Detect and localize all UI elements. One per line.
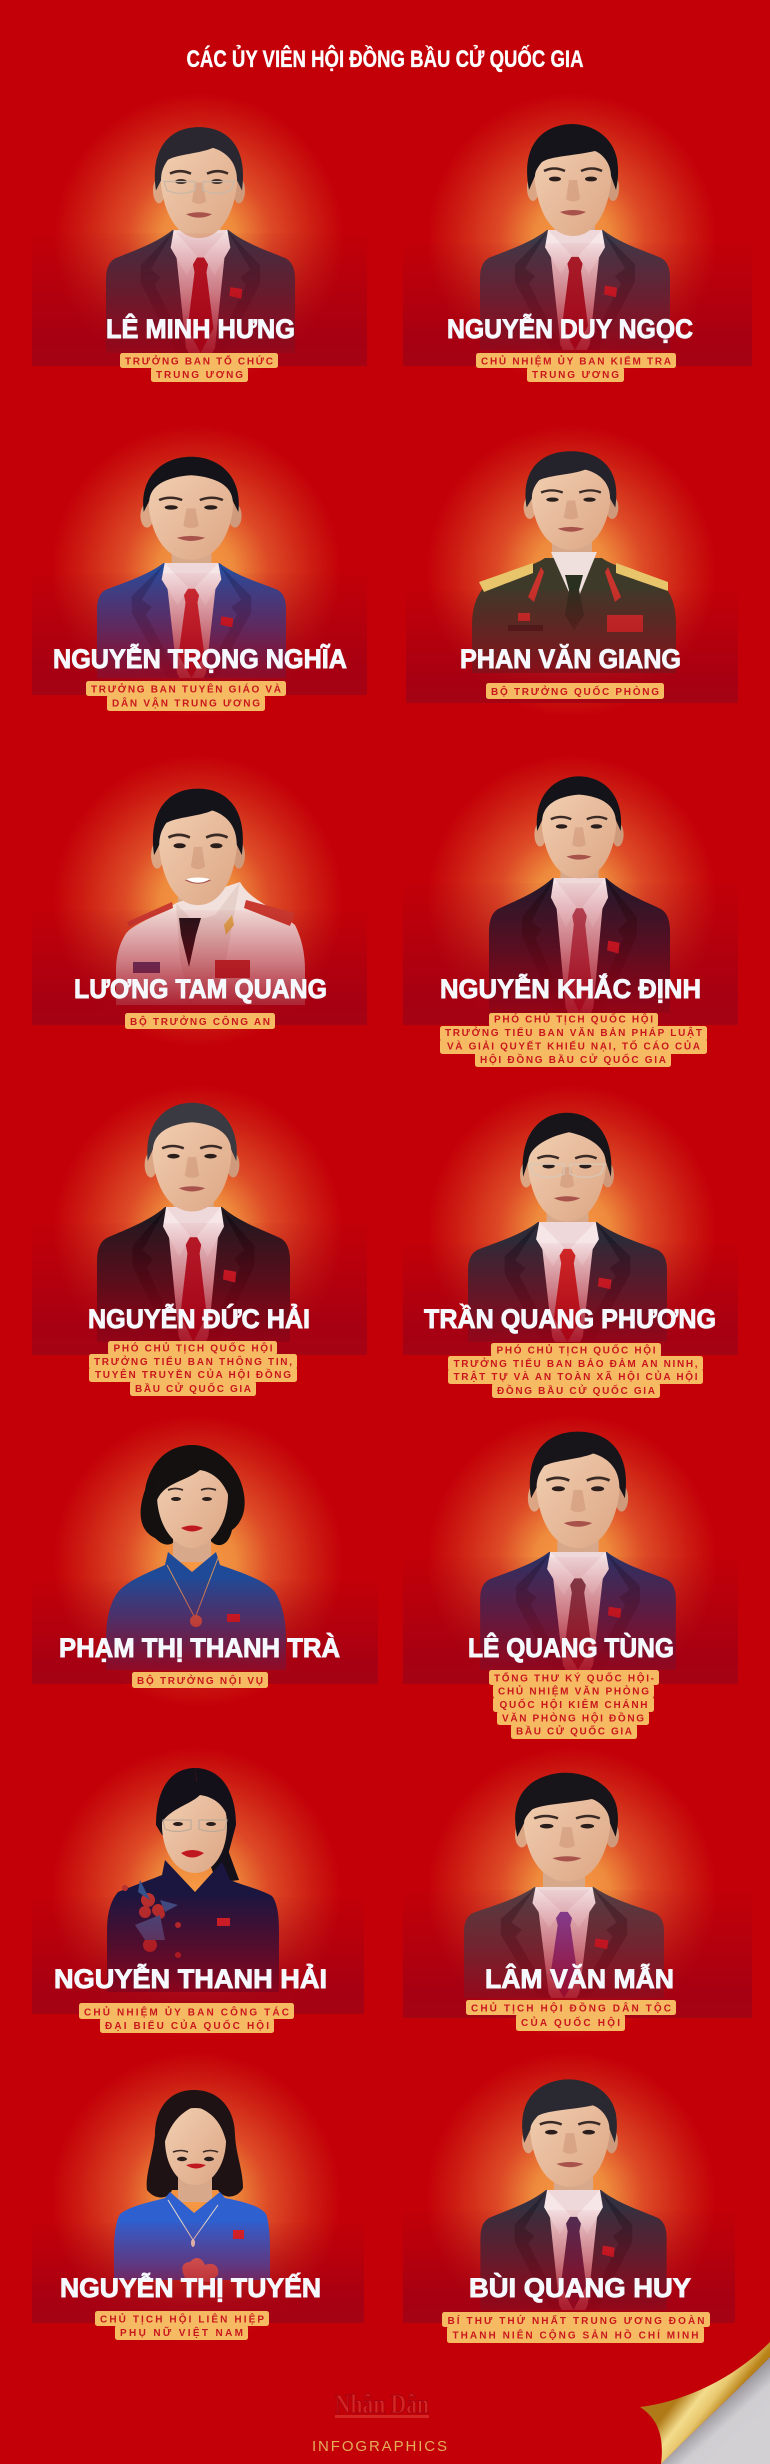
name: PHẠM THỊ THANH TRÀ: [59, 1632, 340, 1663]
role tag: CHỦ NHIỆM VĂN PHÒNG: [498, 1684, 649, 1698]
card: Nguyễn Đức Hải: [32, 1085, 367, 1396]
portrait: Nguyễn Thanh Hải: [107, 1768, 279, 1992]
name: NGUYỄN THỊ TUYẾN: [60, 2272, 321, 2303]
card: Lê Minh Hưng: [32, 93, 367, 385]
role tag: TRUNG ƯƠNG: [156, 370, 243, 381]
portrait: Nguyễn Đức Hải: [97, 1103, 290, 1342]
name panel: [32, 573, 367, 695]
role tag: PHÓ CHỦ TỊCH QUỐC HỘI: [496, 1342, 656, 1356]
name panel: [403, 883, 738, 1025]
role tag: ĐỒNG BẦU CỬ QUỐC GIA: [497, 1383, 655, 1397]
role tag: [125, 1013, 275, 1029]
name: LƯƠNG TAM QUANG: [74, 974, 327, 1004]
role tag: [476, 353, 676, 382]
role tag: PHỤ NỮ VIỆT NAM: [120, 2326, 243, 2339]
name: NGUYỄN KHẮC ĐỊNH: [440, 973, 701, 1004]
card: Phạm Thị Thanh Trà: [32, 1415, 378, 1707]
card: Nguyễn Trọng Nghĩa: [32, 425, 367, 717]
card: Lâm Văn Mẫn: [403, 1747, 752, 2039]
name: NGUYỄN DUY NGỌC: [447, 313, 693, 344]
role tag: [89, 1340, 297, 1396]
card: Phan Văn Giang: [406, 425, 738, 717]
name panel: [32, 233, 367, 366]
role tag: TRUNG ƯƠNG: [532, 370, 619, 381]
name: LÊ QUANG TÙNG: [468, 1632, 674, 1663]
role tag: [95, 2311, 269, 2340]
name panel: [406, 590, 738, 703]
role tag: CHỦ NHIỆM ỦY BAN CÔNG TÁC: [84, 2006, 289, 2018]
name panel: [403, 1890, 752, 2018]
name: TRẦN QUANG PHƯƠNG: [424, 1303, 716, 1334]
role tag: DÂN VẬN TRUNG ƯƠNG: [112, 696, 260, 710]
portrait: Lâm Văn Mẫn: [464, 1773, 664, 1998]
portrait: Lương Tam Quang, white uniform: [116, 789, 305, 1005]
role tag: CHỦ NHIỆM ỦY BAN KIỂM TRA: [481, 354, 671, 368]
card: Nguyễn Khắc Định: [403, 755, 738, 1067]
name panel: [403, 243, 752, 366]
role tag: [489, 1670, 659, 1739]
name panel: [403, 2210, 735, 2323]
role tag: CHỦ TỊCH HỘI ĐỒNG DÂN TỘC: [471, 2002, 671, 2014]
card: Nguyễn Thị Tuyến: [32, 2052, 364, 2344]
role tag: BỘ TRƯỞNG QUỐC PHÒNG: [491, 684, 659, 698]
role tag: [132, 1672, 268, 1688]
name panel: [32, 1223, 367, 1355]
role tag: BỘ TRƯỞNG NỘI VỤ: [137, 1674, 263, 1687]
role tag: TRƯỞNG BAN TỔ CHỨC: [125, 354, 273, 368]
portrait: Phạm Thị Thanh Trà: [106, 1445, 286, 1670]
portrait: Bùi Quang Huy: [480, 2079, 667, 2310]
name: LÂM VĂN MẪN: [485, 1963, 674, 1994]
role tag: ĐẠI BIỂU CỦA QUỐC HỘI: [105, 2018, 269, 2032]
role tag: CỦA QUỐC HỘI: [521, 2015, 620, 2029]
card: Trần Quang Phương: [403, 1085, 738, 1398]
name: LÊ MINH HƯNG: [106, 313, 295, 344]
role tag: BẦU CỬ QUỐC GIA: [135, 1381, 251, 1395]
card: Bùi Quang Huy: [403, 2052, 735, 2344]
portrait: Nguyễn Thị Tuyến: [114, 2090, 270, 2282]
portrait: Lê Minh Hưng: [106, 127, 295, 353]
portrait: Nguyễn Duy Ngọc: [480, 124, 670, 350]
card: Lương Tam Quang: [32, 755, 367, 1047]
role tag: [442, 2312, 710, 2343]
name panel: [403, 1243, 738, 1355]
role tag: PHÓ CHỦ TỊCH QUỐC HỘI: [494, 1012, 653, 1026]
role tag: VÀ GIẢI QUYẾT KHIẾU NẠI, TỐ CÁO CỦA: [447, 1038, 700, 1052]
portrait: Phan Văn Giang, military uniform: [472, 451, 676, 673]
role tag: HỘI ĐỒNG BẦU CỬ QUỐC GIA: [480, 1052, 666, 1066]
card: Nguyễn Duy Ngọc: [403, 93, 752, 385]
role tag: PHÓ CHỦ TỊCH QUỐC HỘI: [114, 1340, 273, 1354]
name: NGUYỄN TRỌNG NGHĨA: [53, 643, 347, 674]
role tag: TRƯỞNG TIỂU BAN VĂN BẢN PHÁP LUẬT: [445, 1026, 702, 1039]
role tag: TRẬT TỰ VÀ AN TOÀN XÃ HỘI CỦA HỘI: [454, 1370, 698, 1383]
name: PHAN VĂN GIANG: [460, 643, 681, 674]
name: NGUYỄN THANH HẢI: [54, 1962, 327, 1994]
portrait: Nguyễn Khắc Định: [489, 776, 670, 1013]
role tag: [79, 2003, 294, 2033]
name panel: [32, 910, 367, 1025]
name panel: [32, 2223, 364, 2323]
role tag: QUỐC HỘI KIÊM CHÁNH: [500, 1697, 648, 1711]
role tag: BỘ TRƯỞNG CÔNG AN: [130, 1015, 270, 1028]
role tag: [120, 353, 278, 382]
role tag: [448, 1342, 703, 1398]
role tag: [486, 683, 664, 699]
role tag: BẦU CỬ QUỐC GIA: [516, 1724, 632, 1738]
role tag: VĂN PHÒNG HỘI ĐỒNG: [502, 1712, 644, 1724]
page curl corner: [640, 2342, 770, 2464]
role tag: THANH NIÊN CỘNG SẢN HỒ CHÍ MINH: [452, 2328, 698, 2342]
portrait: Lê Quang Tùng: [480, 1432, 676, 1670]
role tag: [466, 2000, 676, 2031]
role tag: TỔNG THƯ KÝ QUỐC HỘI-: [494, 1670, 654, 1684]
title: CÁC ỦY VIÊN HỘI ĐỒNG BẦU CỬ QUỐC GIA: [186, 44, 584, 73]
role tag: TRƯỞNG BAN TUYÊN GIÁO VÀ: [91, 682, 281, 696]
role tag: TRƯỞNG TIỂU BAN BẢO ĐẢM AN NINH,: [454, 1357, 698, 1370]
card: Nguyễn Thanh Hải: [32, 1747, 364, 2039]
role tag: TRƯỞNG TIỂU BAN THÔNG TIN,: [94, 1355, 292, 1368]
name panel: [403, 1557, 738, 1684]
portrait: Nguyễn Trọng Nghĩa: [97, 457, 286, 678]
role tag: [86, 681, 286, 711]
role tag: [440, 1012, 707, 1067]
name panel: [32, 1897, 364, 2014]
portrait: Trần Quang Phương: [468, 1113, 667, 1342]
label: infographics: INFOGRAPHICS: [312, 2438, 447, 2455]
name panel: [32, 1580, 378, 1684]
name: BÙI QUANG HUY: [469, 2272, 691, 2303]
name: NGUYỄN ĐỨC HẢI: [88, 1302, 310, 1334]
role tag: TUYÊN TRUYỀN CỦA HỘI ĐỒNG: [95, 1368, 291, 1381]
role tag: CHỦ TỊCH HỘI LIÊN HIỆP: [100, 2312, 264, 2326]
role tag: BÍ THƯ THỨ NHẤT TRUNG ƯƠNG ĐOÀN: [448, 2314, 704, 2327]
card: Lê Quang Tùng: [403, 1415, 738, 1739]
logo: Nhân Dân: Nhân Dân: [335, 2389, 429, 2419]
